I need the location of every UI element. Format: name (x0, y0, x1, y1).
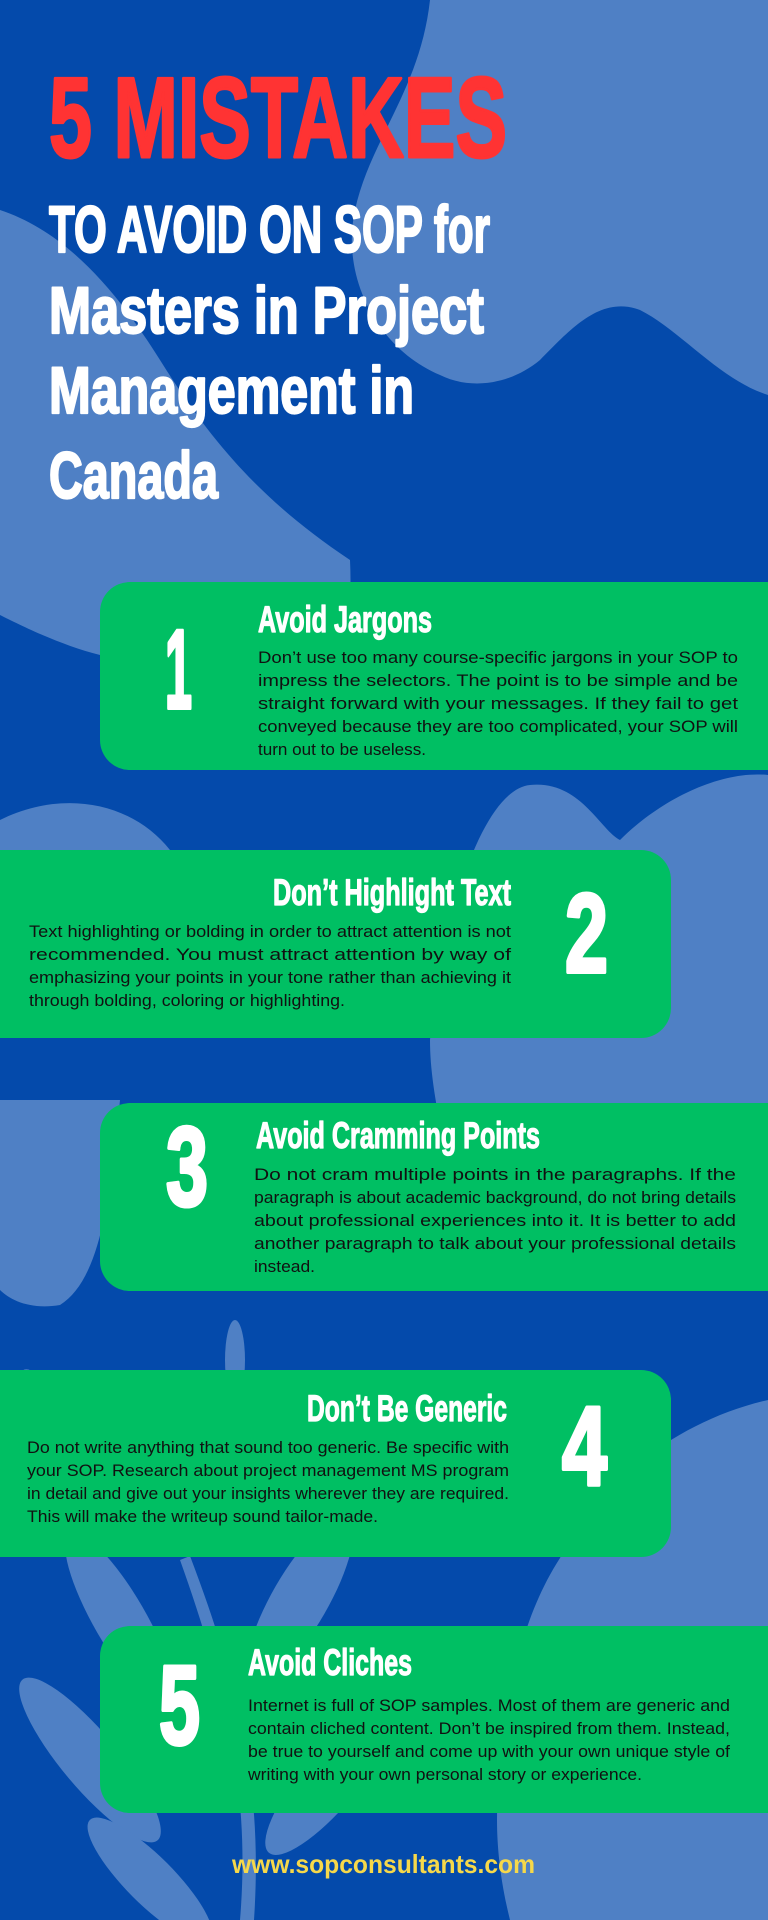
panel: 2 don't highlight text: 2 (565, 871, 608, 996)
panel: 5 avoid cliches: 5 (159, 1643, 200, 1768)
title (49, 55, 507, 512)
panel: 4 don't be generic: 4 (562, 1384, 607, 1509)
panel: 4 don't be generic: your SOP. Research about project management MS program (27, 1462, 509, 1480)
title: Management in (49, 353, 414, 427)
panel: 4 don't be generic (0, 1370, 671, 1557)
panel: 1 avoid jargons: 1 (165, 607, 192, 732)
panel: 3 avoid cramming points: instead. (254, 1258, 315, 1276)
panel: 3 avoid cramming points: another paragraph to talk about your professional details (254, 1235, 736, 1253)
panel: 2 don't highlight text: through bolding, coloring or highlighting. (29, 992, 345, 1010)
panel: 1 avoid jargons: turn out to be useless. (258, 741, 426, 759)
panel: 1 avoid jargons: impress the selectors. The point is to be simple and be (258, 672, 738, 690)
panel: 4 don't be generic: Don’t Be Generic (307, 1388, 507, 1429)
panel: 3 avoid cramming points: Avoid Cramming Points (256, 1115, 540, 1156)
title: 5 MISTAKES (49, 55, 507, 182)
panel: 5 avoid cliches: contain cliched content. Don’t be inspired from them. Instead, (248, 1720, 730, 1738)
panel: 3 avoid cramming points: Do not cram multiple points in the paragraphs. If the (254, 1166, 736, 1184)
panel: 5 avoid cliches (100, 1626, 768, 1813)
panel: 4 don't be generic: Do not write anything that sound too generic. Be specific with (27, 1439, 509, 1457)
footer url: www.sopconsultants.com (231, 1849, 535, 1879)
panel: 2 don't highlight text: recommended. You must attract attention by way of (29, 946, 512, 964)
title: Masters in Project (49, 273, 484, 347)
panel: 5 avoid cliches: be true to yourself and come up with your own unique style of (248, 1743, 730, 1761)
panel: 3 avoid cramming points: paragraph is about academic background, do not bring details (254, 1189, 736, 1207)
panel: 2 don't highlight text (0, 850, 671, 1038)
panel: 2 don't highlight text: Text highlighting or bolding in order to attract attention is not (29, 923, 511, 941)
panel: 3 avoid cramming points (100, 1103, 768, 1291)
panel: 1 avoid jargons: Avoid Jargons (258, 599, 432, 640)
panel: 1 avoid jargons (100, 582, 768, 770)
title: TO AVOID ON SOP for (49, 192, 490, 266)
panel: 1 avoid jargons: straight forward with your messages. If they fail to get (258, 695, 739, 713)
panel: 5 avoid cliches: Avoid Cliches (248, 1642, 412, 1683)
panel: 5 avoid cliches: writing with your own personal story or experience. (247, 1766, 642, 1784)
panel: 3 avoid cramming points: 3 (166, 1104, 208, 1229)
panel: 5 avoid cliches: Internet is full of SOP samples. Most of them are generic and (248, 1697, 730, 1715)
panel: 4 don't be generic: in detail and give out your insights wherever they are required. (27, 1485, 509, 1503)
panel: 1 avoid jargons: conveyed because they are too complicated, your SOP will (258, 718, 738, 736)
decorative leaves (1, 1320, 413, 1920)
panel: 2 don't highlight text: emphasizing your points in your tone rather than achieving it (29, 969, 511, 987)
panel: 3 avoid cramming points: about professional experiences into it. It is better to add (254, 1212, 736, 1230)
title: Canada (49, 438, 219, 512)
panel: 4 don't be generic: This will make the writeup sound tailor-made. (27, 1508, 378, 1526)
panel: 2 don't highlight text: Don’t Highlight Text (273, 872, 511, 913)
panel: 1 avoid jargons: Don’t use too many course-specific jargons in your SOP to (258, 649, 738, 667)
